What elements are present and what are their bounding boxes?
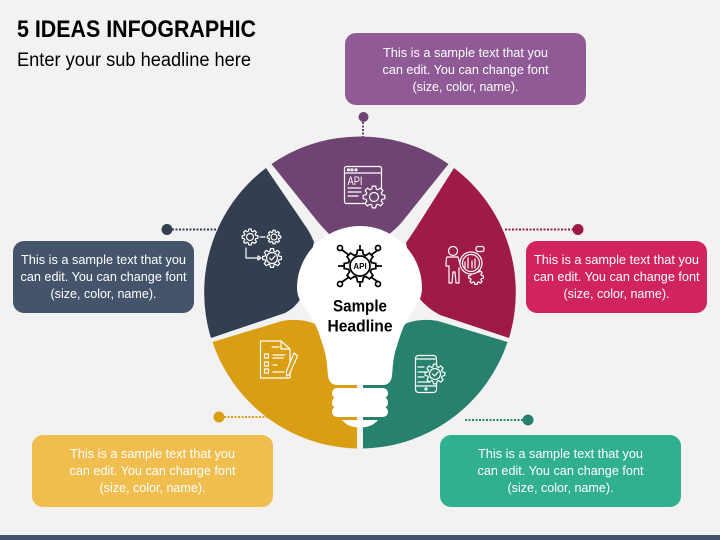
icon: API window: API: [348, 174, 362, 188]
bulb screw threads: [332, 388, 388, 417]
segment: crimson: [406, 168, 516, 338]
callout: green: This is a sample text that you: [478, 447, 643, 461]
callout: green: can edit. You can change font: [478, 464, 644, 478]
callout: crimson: (size, color, name).: [564, 287, 670, 301]
icon: process gears: [242, 229, 281, 267]
connector: yellow: [214, 412, 268, 422]
icon: checklist and pencil: [260, 341, 298, 378]
callout: purple: can edit. You can change font: [382, 63, 549, 77]
icon: analyst with chart: [446, 246, 484, 284]
connector: dark: [162, 224, 216, 235]
callout: yellow: [32, 435, 273, 507]
callout: crimson: [526, 241, 707, 313]
icon: phone with gear: [416, 356, 445, 392]
center icon: API gear: API: [353, 262, 367, 271]
icon: API window: [344, 166, 385, 208]
callout: dark: (size, color, name).: [50, 287, 156, 301]
center icon: API gear: [338, 245, 382, 287]
callout: purple: This is a sample text that you: [383, 46, 548, 60]
callout: purple: (size, color, name).: [412, 80, 518, 94]
segment: green: [363, 320, 508, 448]
segment: dark slate: [204, 168, 314, 338]
callout: dark: can edit. You can change font: [20, 270, 187, 284]
center headline: Sample: [333, 296, 387, 316]
callout: dark: [13, 241, 194, 313]
connector: crimson: [505, 224, 584, 235]
sub headline: Enter your sub headline here: [17, 50, 251, 71]
callout: crimson: can edit. You can change font: [534, 270, 700, 284]
bottom bar: [0, 535, 720, 540]
callout: green: (size, color, name).: [508, 481, 614, 495]
callout: yellow: This is a sample text that you: [70, 447, 235, 461]
light bulb: [297, 226, 422, 428]
connector: green: [465, 414, 534, 426]
bulb base cap: [342, 420, 378, 428]
connector: purple: [358, 112, 368, 137]
callout: yellow: (size, color, name).: [100, 481, 206, 495]
segment: purple: [272, 136, 448, 235]
callout: yellow: can edit. You can change font: [70, 464, 236, 478]
text: Headline: [328, 316, 392, 336]
segment: yellow: [212, 320, 357, 448]
callout: purple: [345, 33, 586, 105]
callout: dark: This is a sample text that you: [21, 253, 186, 267]
callout: green: [440, 435, 681, 507]
callout: crimson: This is a sample text that you: [534, 253, 699, 267]
title: 5 IDEAS INFOGRAPHIC: [17, 16, 256, 43]
